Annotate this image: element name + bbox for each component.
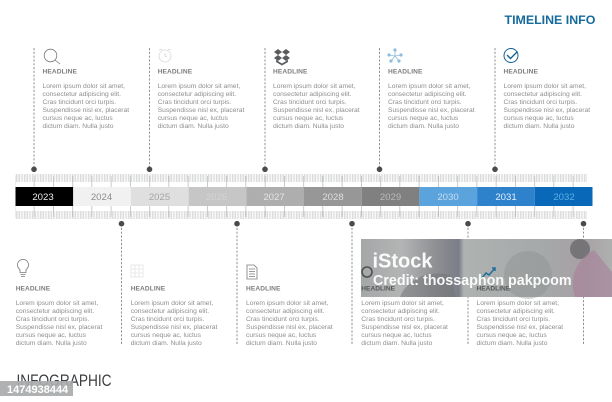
year 2027 xyxy=(246,187,304,206)
panel: bottom item 1: consectetur adipiscing elit. xyxy=(16,308,94,315)
panel: top item 4: Suspendisse nisl ex, placerat xyxy=(388,107,475,114)
panel: top item 3: Suspendisse nisl ex, placerat xyxy=(273,107,360,114)
panel: top item 2: consectetur adipiscing elit. xyxy=(158,91,236,98)
panel: bottom item 5: consectetur adipiscing elit. xyxy=(476,308,555,315)
year 2023 xyxy=(16,187,73,206)
panel: top item 4: Lorem ipsum dolor sit amet, xyxy=(388,83,471,90)
watermark banner: HEADLINE xyxy=(476,286,511,293)
panel: bottom item 3: cursus neque ac, luctus xyxy=(246,332,317,339)
icon: document xyxy=(247,265,257,279)
panel: top item 3: Cras tincidunt orci turpis. xyxy=(273,99,347,106)
infographic label: INFOGRAPHIC xyxy=(16,372,112,390)
year 2028: 2028 xyxy=(322,192,344,203)
panel: bottom item 3: HEADLINE xyxy=(246,286,281,293)
panel: top item 2: Cras tincidunt orci turpis. xyxy=(158,99,231,106)
panel: top item 1: Suspendisse nisl ex, placerat xyxy=(42,107,129,114)
panel: bottom item 3: Cras tincidunt orci turpis. xyxy=(246,316,320,323)
icon: network xyxy=(388,49,402,62)
year 2030: 2030 xyxy=(437,192,459,203)
year 2031: 2031 xyxy=(495,192,517,203)
panel: bottom item 5: Suspendisse nisl ex, placerat xyxy=(476,324,563,331)
year 2029 xyxy=(362,187,419,206)
year 2024 xyxy=(73,187,131,206)
panel: bottom item 2: Suspendisse nisl ex, placerat xyxy=(131,324,217,331)
panel: top item 3: dictum diam. Nulla justo xyxy=(273,123,344,130)
panel: top item 2 xyxy=(158,49,244,130)
panel: bottom item 2: Lorem ipsum dolor sit amet, xyxy=(131,300,213,307)
panel: bottom item 1: dictum diam. Nulla justo xyxy=(16,340,87,347)
connector lines and dots xyxy=(31,48,586,345)
panel: top item 3: HEADLINE xyxy=(273,69,308,76)
panel: top item 1: Cras tincidunt orci turpis. xyxy=(42,99,116,106)
panel: top item 1: Lorem ipsum dolor sit amet, xyxy=(42,83,125,90)
panel: bottom item 1: Suspendisse nisl ex, placerat xyxy=(16,324,102,331)
timeline bar xyxy=(16,187,592,206)
panel: bottom item 5: Lorem ipsum dolor sit amet, xyxy=(476,300,559,307)
icon: gear xyxy=(362,267,372,277)
icon: alarm clock xyxy=(159,49,171,62)
year 2025 xyxy=(131,187,189,206)
panel: bottom item 2: dictum diam. Nulla justo xyxy=(131,340,202,347)
panel: top item 5: consectetur adipiscing elit. xyxy=(504,91,582,98)
panel: top item 4 xyxy=(388,49,475,130)
panel: top item 5 xyxy=(504,48,590,130)
year 2032: 2032 xyxy=(553,192,575,203)
panel: top item 2: HEADLINE xyxy=(158,69,193,76)
title: TIMELINE INFO xyxy=(504,13,596,27)
panel: top item 4: dictum diam. Nulla justo xyxy=(388,123,459,130)
panel: bottom item 2: Cras tincidunt orci turpis. xyxy=(131,316,204,323)
panel: bottom item 5 xyxy=(476,286,563,347)
watermark: credit: Credit: thossaphon pakpoom xyxy=(373,273,572,289)
panel: top item 3: cursus neque ac, luctus xyxy=(273,115,344,122)
panel: top item 5: dictum diam. Nulla justo xyxy=(504,123,575,130)
panel: bottom item 4: HEADLINE xyxy=(361,286,396,293)
panel: bottom item 1 xyxy=(16,259,102,347)
panel: bottom item 5: cursus neque ac, luctus xyxy=(476,332,547,339)
panel: top item 2: cursus neque ac, luctus xyxy=(158,115,229,122)
panel: bottom item 2: consectetur adipiscing elit. xyxy=(131,308,209,315)
panel: top item 3: consectetur adipiscing elit. xyxy=(273,91,352,98)
icon: check circle xyxy=(504,48,518,62)
year 2028 xyxy=(304,187,362,206)
panel: bottom item 4: Lorem ipsum dolor sit amet, xyxy=(361,300,444,307)
panel: bottom item 2 xyxy=(131,265,217,347)
panel: bottom item 4: dictum diam. Nulla justo xyxy=(361,340,433,347)
panel: bottom item 2: HEADLINE xyxy=(131,286,166,293)
year 2025: 2025 xyxy=(149,192,170,203)
year 2032 xyxy=(535,187,592,206)
year 2024: 2024 xyxy=(91,192,113,203)
year 2031 xyxy=(477,187,535,206)
year 2027: 2027 xyxy=(263,192,285,203)
year 2026 xyxy=(189,187,246,206)
panel: bottom item 3: Lorem ipsum dolor sit amet, xyxy=(246,300,329,307)
panel: bottom item 2: cursus neque ac, luctus xyxy=(131,332,202,339)
panel: bottom item 1: HEADLINE xyxy=(16,286,51,293)
year 2030 xyxy=(419,187,477,206)
panel: bottom item 1: Lorem ipsum dolor sit amet, xyxy=(16,300,98,307)
watermark: image id: 1474938444 xyxy=(7,384,69,396)
panel: bottom item 3 xyxy=(246,265,333,347)
panel: bottom item 4: consectetur adipiscing elit. xyxy=(361,308,440,315)
ruler ticks xyxy=(15,174,587,219)
panel: bottom item 5: HEADLINE xyxy=(476,286,512,293)
panel: top item 4: consectetur adipiscing elit. xyxy=(388,91,467,98)
watermark banner xyxy=(361,239,612,299)
panel: bottom item 3: dictum diam. Nulla justo xyxy=(246,340,317,347)
panel: top item 1 xyxy=(42,49,129,130)
panel: bottom item 4: Cras tincidunt orci turpis. xyxy=(361,316,435,323)
panel: bottom item 4 xyxy=(361,286,448,347)
panel: bottom item 5: dictum diam. Nulla justo xyxy=(476,340,548,347)
year 2026: 2026 xyxy=(206,192,227,203)
panel: top item 1: consectetur adipiscing elit. xyxy=(42,91,121,98)
panel: bottom item 4: Suspendisse nisl ex, placerat xyxy=(361,324,448,331)
year 2023: 2023 xyxy=(32,192,54,203)
panel: top item 5: Lorem ipsum dolor sit amet, xyxy=(504,83,586,90)
icon: dropbox xyxy=(274,49,290,66)
watermark banner: HEADLINE xyxy=(361,286,396,293)
year 2029: 2029 xyxy=(380,192,401,203)
panel: bottom item 4: cursus neque ac, luctus xyxy=(361,332,432,339)
panel: bottom item 1: Cras tincidunt orci turpis. xyxy=(16,316,89,323)
panel: top item 1: dictum diam. Nulla justo xyxy=(42,123,114,130)
panel: top item 3 xyxy=(273,49,360,130)
panel: top item 4: HEADLINE xyxy=(388,69,423,76)
watermark: image id xyxy=(0,381,73,396)
panel: top item 2: Suspendisse nisl ex, placerat xyxy=(158,107,244,114)
panel: top item 2: Lorem ipsum dolor sit amet, xyxy=(158,83,240,90)
icon: magnifier xyxy=(44,49,60,64)
panel: top item 4: cursus neque ac, luctus xyxy=(388,115,459,122)
panel: top item 2: dictum diam. Nulla justo xyxy=(158,123,229,130)
panel: top item 5: HEADLINE xyxy=(504,69,539,76)
watermark: iStock: iStock xyxy=(372,250,433,272)
panel: top item 5: cursus neque ac, luctus xyxy=(504,115,574,122)
icon: light bulb xyxy=(18,259,28,276)
panel: top item 1: HEADLINE xyxy=(42,69,78,76)
icon: growth chart xyxy=(482,268,495,278)
panel: top item 3: Lorem ipsum dolor sit amet, xyxy=(273,83,356,90)
panel: top item 4: Cras tincidunt orci turpis. xyxy=(388,99,462,106)
panel: bottom item 1: cursus neque ac, luctus xyxy=(16,332,87,339)
icon: grid xyxy=(131,265,143,277)
panel: top item 1: cursus neque ac, luctus xyxy=(42,115,113,122)
panel: bottom item 3: consectetur adipiscing elit. xyxy=(246,308,325,315)
panel: top item 5: Suspendisse nisl ex, placerat xyxy=(504,107,590,114)
panel: top item 5: Cras tincidunt orci turpis. xyxy=(504,99,577,106)
panel: bottom item 3: Suspendisse nisl ex, placerat xyxy=(246,324,333,331)
panel: bottom item 5: Cras tincidunt orci turpis. xyxy=(476,316,550,323)
